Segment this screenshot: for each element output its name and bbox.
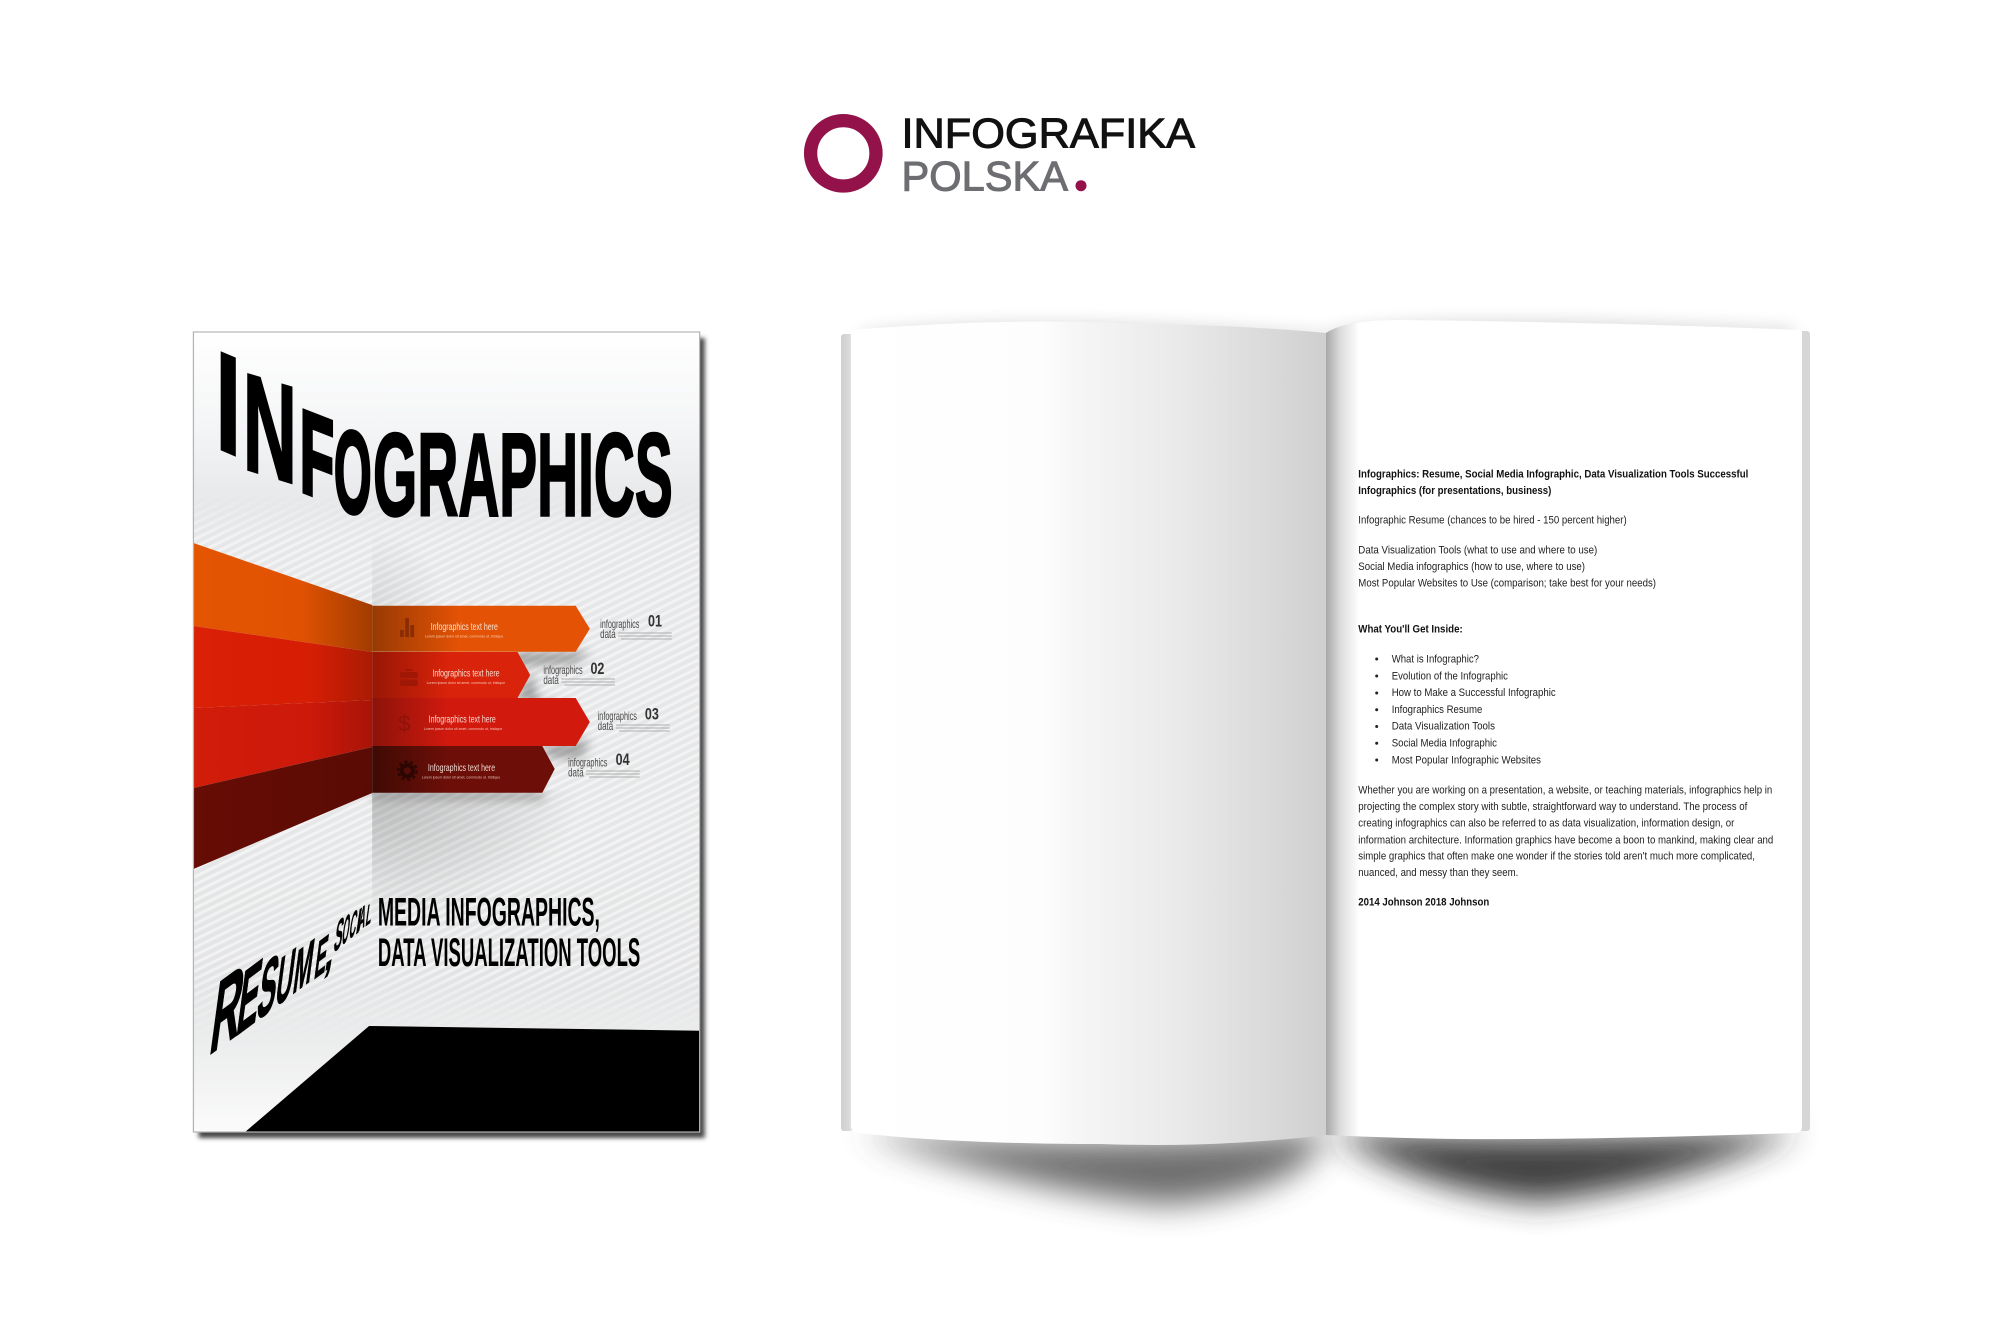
data label 01: infographics [600, 618, 640, 631]
cover subtitle: RESUME, SOCIAL (perspective): I [354, 901, 364, 944]
icon: dollar sign: $ [398, 711, 411, 736]
page text: summary lines: Social Media infographics (how to use, where to use) [1358, 561, 1585, 573]
cover title: INFOGRAPHICS: O [334, 406, 372, 542]
data label 02: 02 [590, 659, 604, 678]
arrow 03 [372, 698, 590, 746]
data label 04: 04 [616, 750, 630, 769]
page text: body paragraph: creating infographics can also be referred to as data visualization, information design, or [1358, 818, 1735, 830]
icon: bar chart [400, 618, 414, 637]
cover title: INFOGRAPHICS: N [243, 344, 297, 514]
page text: bullet list: Most Popular Infographic Websites [1392, 754, 1542, 766]
cover subtitle: RESUME, SOCIAL (perspective): E [232, 938, 267, 1058]
page text: summary lines: Infographic Resume (chances to be hired - 150 percent higher) [1358, 514, 1627, 526]
top page shadow [860, 320, 1795, 340]
data label 01: data [600, 628, 616, 641]
arrow 01 [372, 606, 590, 652]
page text: bullet list: Infographics Resume [1392, 704, 1482, 716]
logo wordmark line 1: INFOGRAFIKA [902, 109, 1195, 156]
book cover [193, 318, 705, 1138]
cover subtitle: RESUME, SOCIAL (perspective): U [272, 931, 300, 1024]
cover subtitle: RESUME, SOCIAL (perspective) [210, 904, 371, 1055]
cover title: INFOGRAPHICS: I [215, 318, 242, 489]
logo wordmark line 2: POLSKA [902, 153, 1068, 200]
cover subtitle: RESUME, SOCIAL (perspective): O [340, 905, 352, 955]
page text: body paragraph: simple graphics that often make one wonder if the stories told aren't much more complicated, [1358, 850, 1755, 862]
left wall ribbons [193, 543, 372, 869]
back cover right edge [1798, 331, 1810, 1131]
cover subtitle: RESUME, SOCIAL (perspective): S [253, 936, 284, 1040]
icon: gear [398, 762, 417, 780]
icon: briefcase [400, 669, 418, 686]
data label 01 [600, 615, 672, 640]
cover title: INFOGRAPHICS: F [300, 384, 334, 528]
page text: body paragraph: Whether you are working on a presentation, a website, or teaching materials, infographics help in [1358, 784, 1772, 796]
back cover left edge [841, 334, 854, 1131]
cover subtitle: RESUME, SOCIAL (perspective): M [290, 925, 318, 1009]
cover subtitle: RESUME, SOCIAL (perspective): E [312, 922, 331, 992]
left page shadow [860, 1132, 1326, 1205]
page text: heading: Infographics: Resume, Social Media Infographic, Data Visualization Tools Successful [1358, 468, 1748, 480]
logo: Infografika Polska [811, 109, 1195, 200]
page text: body paragraph: information architecture. Information graphics have become a boon to mankind, making clear and [1358, 834, 1773, 846]
page text: body paragraph: nuanced, and messy than they seem. [1358, 867, 1518, 879]
open book [841, 320, 1810, 1205]
data label 04: infographics [568, 757, 607, 770]
data label 04: data [568, 767, 584, 780]
arrow 03 text: Infographics text here [429, 714, 496, 726]
arrow 02 text: Infographics text here [432, 668, 500, 680]
cover subtitle: RESUME, SOCIAL (perspective): S [331, 907, 347, 964]
data label 03: infographics [598, 710, 637, 723]
arrow 02 subtext: Lorem ipsum dolor sit amet, commodo ut, tristique [427, 681, 505, 685]
logo dot [1076, 180, 1086, 191]
data label 04 [568, 754, 640, 778]
page text: bullet list: Data Visualization Tools [1392, 721, 1496, 733]
arrow 04 text: Infographics text here [428, 762, 495, 774]
page text: body paragraph: projecting the complex story with subtle, straightforward way to understand. The process of [1358, 801, 1748, 813]
arrow 01 subtext: Lorem ipsum dolor sit amet, commodo ut, tristique [425, 634, 503, 638]
arrow 03 subtext: Lorem ipsum dolor sit amet, commodo ut, tristique [424, 727, 502, 731]
cover subtitle: RESUME, SOCIAL (perspective): , [322, 920, 339, 983]
right page shadow [1332, 1130, 1800, 1202]
data label 03: 03 [645, 705, 659, 723]
data label 02 [544, 662, 615, 686]
data label 03: data [598, 720, 614, 733]
black floor [245, 1026, 700, 1132]
cover subtitle: RESUME, SOCIAL (perspective): A [357, 897, 368, 940]
page text: heading: Infographics (for presentations, business) [1358, 485, 1552, 497]
page text: bullet list: Social Media Infographic [1392, 738, 1498, 750]
cover subtitle: RESUME, SOCIAL (perspective): C [347, 901, 360, 949]
arrow 01 text: Infographics text here [431, 621, 498, 633]
cover artwork: DATA VISUALIZATION TOOLS [378, 931, 640, 975]
data label 02: data [543, 674, 559, 687]
arrow 04 subtext: Lorem ipsum dolor sit amet, commodo ut, tristique [422, 776, 500, 779]
cover drop shadow [199, 338, 705, 1138]
page text: summary lines [1358, 514, 1656, 590]
cover artwork [193, 318, 700, 1132]
3D ribbons chart [193, 543, 591, 869]
page text: heading [1358, 468, 1748, 497]
data label 02: infographics [543, 664, 583, 677]
cover artwork: MEDIA INFOGRAPHICS, [378, 890, 600, 935]
page text: bullet list: Evolution of the Infographic [1392, 670, 1509, 682]
page text: summary lines: Data Visualization Tools (what to use and where to use) [1358, 544, 1597, 556]
data label 03 [598, 708, 670, 732]
icon: logo ring [811, 121, 876, 186]
right page [1326, 320, 1802, 1139]
cover subtitle: RESUME, SOCIAL (perspective): R [205, 940, 250, 1079]
cover edge [193, 332, 700, 1132]
arrow 04 [372, 746, 555, 793]
cover title: INFOGRAPHICS [220, 351, 672, 518]
left page [851, 322, 1326, 1145]
page text: bullet list: What is Infographic? [1392, 654, 1479, 666]
cover subtitle: RESUME, SOCIAL (perspective): L [364, 895, 374, 934]
page text: summary lines: Most Popular Websites to Use (comparison; take best for your needs) [1358, 578, 1656, 590]
data label 01: 01 [648, 612, 662, 631]
page text: what you'll get heading: What You'll Get Inside: [1358, 624, 1463, 636]
arrow 02 [372, 652, 530, 698]
page text: body paragraph [1358, 784, 1773, 879]
page text: authors line: 2014 Johnson 2018 Johnson [1358, 897, 1489, 909]
cover artwork: GRAPHICS [373, 409, 673, 541]
page text: bullet list: How to Make a Successful Infographic [1392, 687, 1556, 699]
page text: bullet list [1375, 654, 1556, 766]
arrow shadows [372, 652, 591, 800]
